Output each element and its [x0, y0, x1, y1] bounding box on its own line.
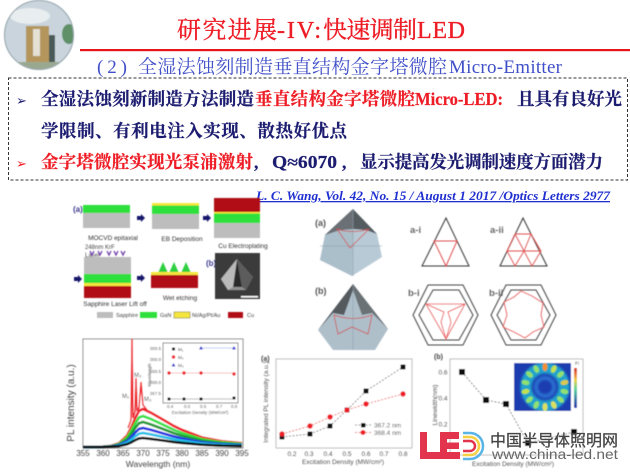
material legend: Ni/Ag/Pt/Au: [192, 313, 220, 319]
point two text: 显示提高发光调制速度方面潜力: [360, 152, 603, 172]
SEM micrograph: [215, 253, 260, 299]
inset chart: wavelength vs density: 368.0: [150, 380, 161, 385]
step: MOCVD epitaxial: [83, 205, 138, 242]
linewidth series: [459, 369, 577, 446]
point two text: ,: [342, 152, 346, 172]
axis labels: Excitation Density (MW/cm²): [472, 461, 554, 468]
inset chart: wavelength vs density: 369.0: [150, 357, 161, 362]
panel: fabrication process diagram: [73, 198, 268, 319]
axis labels: (a): [261, 356, 270, 363]
inset chart: wavelength vs density: [147, 343, 238, 415]
point one text: 垂直结构金字塔微腔: [255, 89, 416, 109]
x axis ticks and labels: [76, 449, 249, 469]
legend: 367.2 nm: [374, 422, 401, 430]
x axis ticks and labels: Wavelength (nm): [126, 459, 190, 469]
diagram: pyramid model a: [315, 209, 382, 276]
point two text: [41, 152, 603, 172]
chart: linewidth with heat map: [432, 354, 583, 468]
point two text: ,: [254, 152, 258, 172]
point one text: [41, 89, 622, 141]
series 368.4 nm: [279, 391, 406, 437]
diagram: pyramid model b: (b): [315, 286, 326, 296]
step: wet etching: [151, 262, 198, 302]
diagram: triangle a-i: a-i: [410, 225, 421, 236]
point two text: 金字塔微腔实现光泵浦激射: [41, 152, 254, 172]
letter L: [420, 432, 440, 459]
axis labels: 0.7: [379, 451, 389, 458]
heat map inset: [514, 361, 579, 411]
panel labels a and b: [73, 205, 217, 268]
inset chart: wavelength vs density: 369.5: [150, 346, 161, 351]
diagram: triangle a-ii: [490, 218, 547, 266]
peak labels: [122, 373, 152, 403]
peak labels: M₂: [134, 373, 142, 379]
step: wet etching: Wet etching: [163, 295, 197, 302]
title: LED: [417, 18, 465, 44]
subtitle: Micro-Emitter: [449, 57, 563, 78]
axis labels: [432, 354, 554, 468]
inset chart: wavelength vs density: 0.5: [184, 404, 191, 409]
material legend: Cu: [247, 313, 254, 319]
point one text: 且具有良好光: [517, 89, 622, 109]
axis labels: 0.6: [438, 370, 448, 376]
inset chart: wavelength vs density: 0.4: [167, 404, 174, 409]
step: laser lift off: 248nm KrF: [85, 245, 115, 251]
step: laser lift off: Sapphire Laser Lift off: [83, 301, 147, 308]
diagram: hexagon b-i: [408, 285, 478, 345]
icon: university building logo: [4, 0, 76, 74]
inset chart: wavelength vs density: M₂: [178, 355, 184, 360]
step: Cu electroplating: [214, 198, 268, 250]
material legend: Sapphire: [116, 313, 138, 319]
axis labels: (b): [434, 354, 443, 361]
axis labels: 0.2: [438, 422, 448, 428]
diagram: hexagon b-ii: [489, 285, 556, 345]
peak labels: M₁: [122, 394, 129, 400]
chart: PL spectrum: [66, 339, 249, 469]
inset chart: wavelength vs density: 367.5: [150, 391, 161, 396]
inset chart: wavelength vs density: M₃: [178, 363, 184, 368]
diagram: triangle a-ii: a-ii: [490, 225, 504, 236]
axis labels: Excitation Density (MW/cm²): [302, 459, 384, 466]
axis labels: 0.6: [361, 451, 371, 458]
panel labels a and b: (a): [73, 205, 83, 214]
citation: L. C. Wang, Vol. 42, No. 15 / August 1 2017 /Optics Letters 2977: [255, 188, 611, 203]
peak labels: M₃: [144, 397, 152, 403]
step: EB deposition: [152, 203, 203, 243]
diagram: pyramid model a: (a): [315, 218, 326, 228]
axis labels: 0.8: [398, 451, 408, 458]
diagram: pyramid model b: [315, 284, 388, 350]
x axis ticks and labels: 385: [195, 449, 209, 458]
inset chart: wavelength vs density: 0.8: [231, 404, 238, 409]
step: Cu electroplating: Cu Electroplating: [218, 243, 268, 250]
x axis ticks and labels: 390: [215, 449, 229, 458]
x axis ticks and labels: 355: [76, 449, 90, 458]
material legend: [97, 312, 254, 319]
axis labels: 0.3: [304, 451, 314, 458]
bullet one: ➢: [16, 94, 27, 109]
point one text: 学限制、有利电注入实现、散热好优点: [41, 121, 348, 141]
legend: 368.4 nm: [374, 430, 401, 437]
inset chart: wavelength vs density: 0.6: [200, 404, 207, 409]
material legend: GaN: [160, 313, 171, 319]
panel labels a and b: (b): [206, 259, 217, 268]
panel: key points dashed box: [8, 78, 628, 180]
diagram: triangle a-i: [410, 218, 469, 266]
x axis ticks and labels: 375: [156, 449, 170, 458]
diagram: hexagon b-ii: b-ii: [489, 288, 503, 299]
point two text: Q≈6070: [272, 152, 337, 172]
step: MOCVD epitaxial: MOCVD epitaxial: [88, 235, 138, 242]
inset chart: wavelength vs density: Wavelength: [147, 363, 152, 387]
axis labels: 0.4: [323, 451, 333, 458]
step: laser lift off: [83, 245, 147, 308]
subtitle: (2): [97, 57, 127, 78]
axis labels: 0.2: [287, 451, 297, 458]
inset chart: wavelength vs density: 368.5: [150, 369, 161, 374]
axis labels: 0.4: [438, 396, 448, 402]
watermark text: 中国半导体照明网: [490, 432, 618, 450]
diagram: hexagon b-i: b-i: [408, 288, 420, 299]
axis labels: Integrated PL intensity (a.u.): [263, 361, 270, 443]
watermark logo: LED: [420, 432, 483, 459]
watermark text: [490, 432, 618, 462]
watermark text: www.china-led.net: [491, 446, 618, 462]
title: [177, 17, 465, 44]
x axis ticks and labels: 365: [116, 449, 130, 458]
inset chart: wavelength vs density: Excitation Density (MW/cm²): [172, 410, 229, 415]
spectrum curves: [83, 409, 242, 447]
letter E: [440, 432, 460, 459]
subtitle: [97, 56, 563, 78]
y axis label: PL intensity (a.u.): [66, 364, 77, 442]
step: EB deposition: EB Deposition: [161, 236, 203, 243]
x axis ticks and labels: 395: [235, 449, 249, 458]
heat map inset: |E|: [575, 361, 579, 365]
inset chart: wavelength vs density: 0.7: [216, 404, 223, 409]
legend: [355, 422, 401, 437]
point one text: 全湿法蚀刻新制造方法制造: [41, 89, 254, 109]
axis labels: 0.5: [342, 451, 352, 458]
step: laser lift off: Laser: [85, 253, 100, 259]
bullet two: ➢: [16, 157, 27, 172]
title: 快速调制: [323, 17, 417, 44]
title underline: [80, 49, 630, 51]
x axis ticks and labels: 380: [175, 449, 189, 458]
subtitle: 全湿法蚀刻制造垂直结构金字塔微腔: [138, 56, 447, 78]
chart: integrated PL intensity: [261, 356, 412, 466]
inset chart: wavelength vs density: M₁: [178, 347, 184, 352]
series 367.2 nm: [280, 364, 406, 440]
process arrows: [74, 214, 211, 283]
axis labels: Linewidth(nm): [432, 385, 439, 425]
letter D arcs: [463, 433, 483, 459]
title: -IV:: [277, 18, 321, 44]
x axis ticks and labels: 360: [96, 449, 110, 458]
x axis ticks and labels: 370: [136, 449, 150, 458]
point one text: Micro-LED:: [415, 89, 503, 109]
lasing peaks: [128, 339, 147, 428]
title: 研究进展: [177, 17, 277, 44]
axis labels: [261, 356, 408, 466]
